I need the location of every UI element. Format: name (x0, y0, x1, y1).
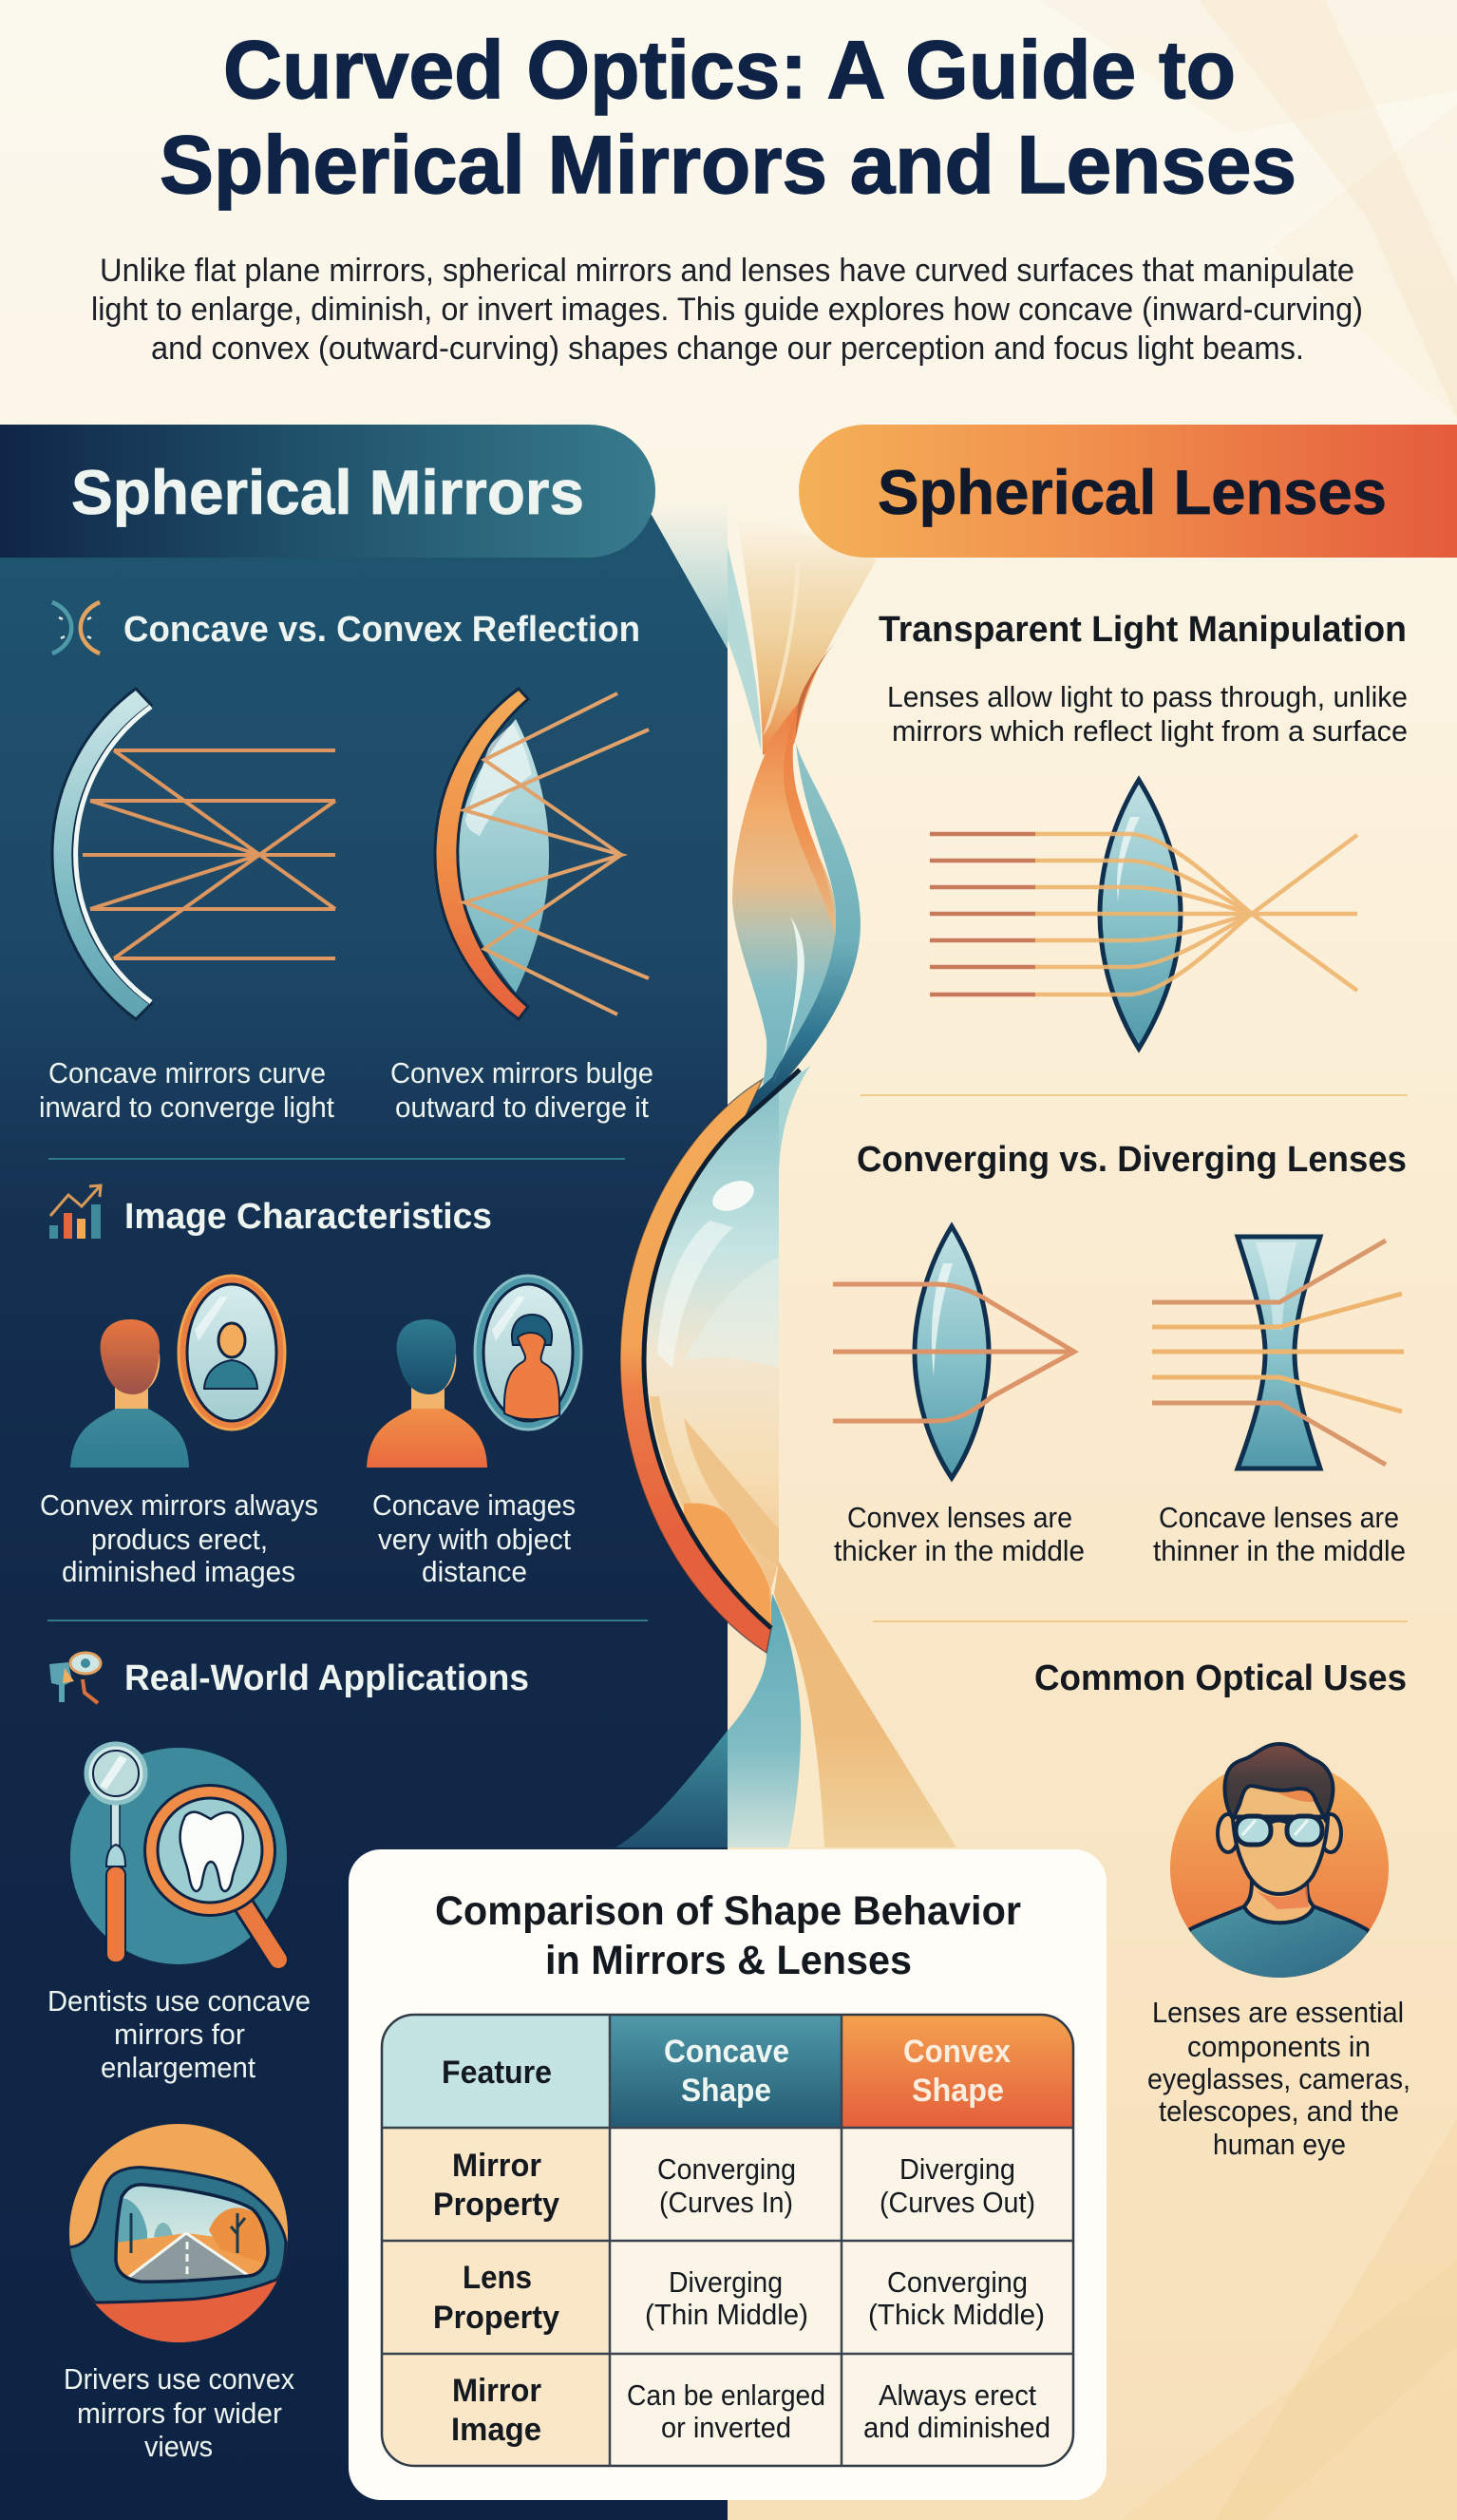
intro paragraph: and convex (outward-curving) shapes change our perception and focus light beams. (151, 331, 1304, 367)
comparison table: Always erect (879, 2378, 1036, 2412)
diagram: converging lens with rays (930, 780, 1357, 1049)
lower peach light beam (774, 1562, 956, 1847)
heading: image characteristics: Image Characteristics (124, 1197, 492, 1237)
comparison table: (Curves In) (659, 2186, 793, 2219)
comparison table: (Thick Middle) (868, 2298, 1045, 2331)
caption: dentists (47, 1984, 311, 2084)
comparison table: (Curves Out) (880, 2186, 1035, 2219)
caption: lens uses: Lenses are essential (1152, 1996, 1404, 2029)
comparison table: Can be enlarged (627, 2378, 825, 2412)
icon: bar chart with arrow (49, 1185, 101, 1239)
caption: concave mirrors (39, 1056, 334, 1124)
heading: converging vs diverging lenses: Converging vs. Diverging Lenses (857, 1140, 1407, 1180)
comparison table: or inverted (661, 2411, 791, 2444)
comparison table: Lens (463, 2260, 532, 2296)
heading: common optical uses: Common Optical Uses (1034, 1658, 1407, 1698)
pale teal ribbon beside panel (652, 489, 761, 750)
illustration: person with concave mirror (367, 1276, 581, 1468)
lower teal ribbon (615, 1594, 801, 1847)
caption: lens uses: components in (1187, 2030, 1371, 2063)
caption: convex mirrors (390, 1056, 653, 1124)
comparison table: Feature (442, 2055, 552, 2091)
caption: lens uses: telescopes, and the (1159, 2094, 1399, 2128)
caption: drivers: views (144, 2430, 213, 2463)
caption: lens uses: human eye (1213, 2128, 1346, 2161)
caption: concave lenses (1153, 1501, 1406, 1567)
caption: dentists: Dentists use concave (47, 1984, 311, 2018)
comparison table: (Thin Middle) (645, 2298, 808, 2331)
comparison table: Concave (664, 2034, 789, 2070)
caption: concave lenses: thinner in the middle (1153, 1534, 1406, 1567)
caption: dentists: enlargement (101, 2051, 255, 2084)
header: spherical mirrors: Spherical Mirrors (71, 457, 584, 527)
caption: convex mirrors: Convex mirrors bulge (390, 1056, 653, 1089)
heading: transparent light manipulation: Transparent Light Manipulation (879, 610, 1407, 650)
comparison table: Shape (681, 2073, 771, 2109)
central light ribbons (731, 508, 877, 1178)
caption: concave images: very with object (378, 1523, 571, 1556)
panel: spherical mirrors background (0, 513, 728, 2520)
comparison table: Diverging (669, 2265, 783, 2299)
comparison table: Converging (887, 2265, 1028, 2299)
lower cream strip (772, 1596, 824, 1847)
comparison table: Mirror (452, 2373, 541, 2409)
text: lenses allow light (887, 680, 1408, 748)
diagram: convex mirror (435, 689, 649, 1019)
large central lens (620, 1070, 800, 1653)
caption: convex lenses (834, 1501, 1085, 1567)
icon: concave and convex arcs (52, 602, 100, 654)
caption: convex lenses: Convex lenses are (847, 1501, 1072, 1534)
comparison table: Diverging (899, 2152, 1015, 2186)
header: spherical mirrors (0, 425, 655, 558)
caption: convex mirrors: outward to diverge it (395, 1090, 649, 1124)
caption: lens uses: eyeglasses, cameras, (1147, 2062, 1410, 2095)
title: Spherical Mirrors and Lenses (160, 120, 1296, 211)
decorative background triangles: bottom right (1121, 2118, 1457, 2520)
caption: convex lenses: thicker in the middle (834, 1534, 1085, 1567)
caption: concave mirrors: Concave mirrors curve (48, 1056, 326, 1089)
heading: concave vs convex reflection: Concave vs. Convex Reflection (123, 610, 640, 650)
diagram: convex lens (833, 1226, 1074, 1478)
caption: concave images: distance (422, 1555, 527, 1588)
comparison table: Shape (912, 2073, 1004, 2109)
comparison table: Image (451, 2412, 541, 2448)
caption: concave lenses: Concave lenses are (1159, 1501, 1399, 1534)
comparison table: Property (433, 2300, 559, 2336)
caption: concave mirrors: inward to converge light (39, 1090, 334, 1124)
text: lenses allow light: mirrors which reflect light from a surface (892, 714, 1408, 748)
comparison table: and diminished (863, 2411, 1050, 2444)
caption: concave images: Concave images (372, 1488, 576, 1522)
decorative background triangles: top right (1041, 0, 1457, 418)
text: lenses allow light: Lenses allow light to pass through, unlike (887, 680, 1408, 713)
panel: comparison card (349, 1849, 1107, 2500)
diagram: concave mirror (52, 689, 335, 1019)
illustration: person with glasses (1170, 1742, 1389, 1978)
comparison table: Property (433, 2187, 559, 2223)
caption: drivers: mirrors for wider (77, 2397, 282, 2430)
intro paragraph: Unlike flat plane mirrors, spherical mirrors and lenses have curved surfaces that manipulate (100, 253, 1354, 289)
intro paragraph: light to enlarge, diminish, or invert images. This guide explores how concave (inward-curving) (91, 292, 1363, 328)
caption: dentists: mirrors for (114, 2018, 245, 2051)
title (160, 25, 1296, 211)
comparison table: Mirror (452, 2148, 541, 2184)
comparison table: Converging (657, 2152, 796, 2186)
comparison table: Convex (903, 2034, 1011, 2070)
comparison title: in Mirrors & Lenses (545, 1938, 912, 1983)
caption: convex mirror images (40, 1488, 318, 1588)
comparison table (382, 2015, 1073, 2466)
heading: real-world applications: Real-World Applications (124, 1658, 529, 1698)
illustration: person with convex mirror (70, 1276, 285, 1468)
comparison title (435, 1888, 1021, 1983)
caption: drivers: Drivers use convex (64, 2362, 294, 2396)
caption: convex mirror images: diminished images (62, 1555, 295, 1588)
illustration: car side mirror (69, 2124, 288, 2342)
diagram: concave lens (1152, 1237, 1404, 1468)
caption: convex mirror images: producs erect, (91, 1523, 268, 1556)
header: spherical lenses (799, 425, 1457, 558)
comparison title: Comparison of Shape Behavior (435, 1888, 1021, 1934)
icon: real-world tools (49, 1653, 101, 1703)
caption: convex mirror images: Convex mirrors always (40, 1488, 318, 1522)
intro paragraph (91, 253, 1363, 367)
header: spherical lenses: Spherical Lenses (878, 457, 1387, 527)
caption: concave images (372, 1488, 576, 1588)
caption: lens uses (1147, 1996, 1410, 2161)
caption: drivers (64, 2362, 294, 2463)
illustration: dentist mirror and tooth (70, 1744, 287, 1964)
title: Curved Optics: A Guide to (223, 25, 1236, 116)
